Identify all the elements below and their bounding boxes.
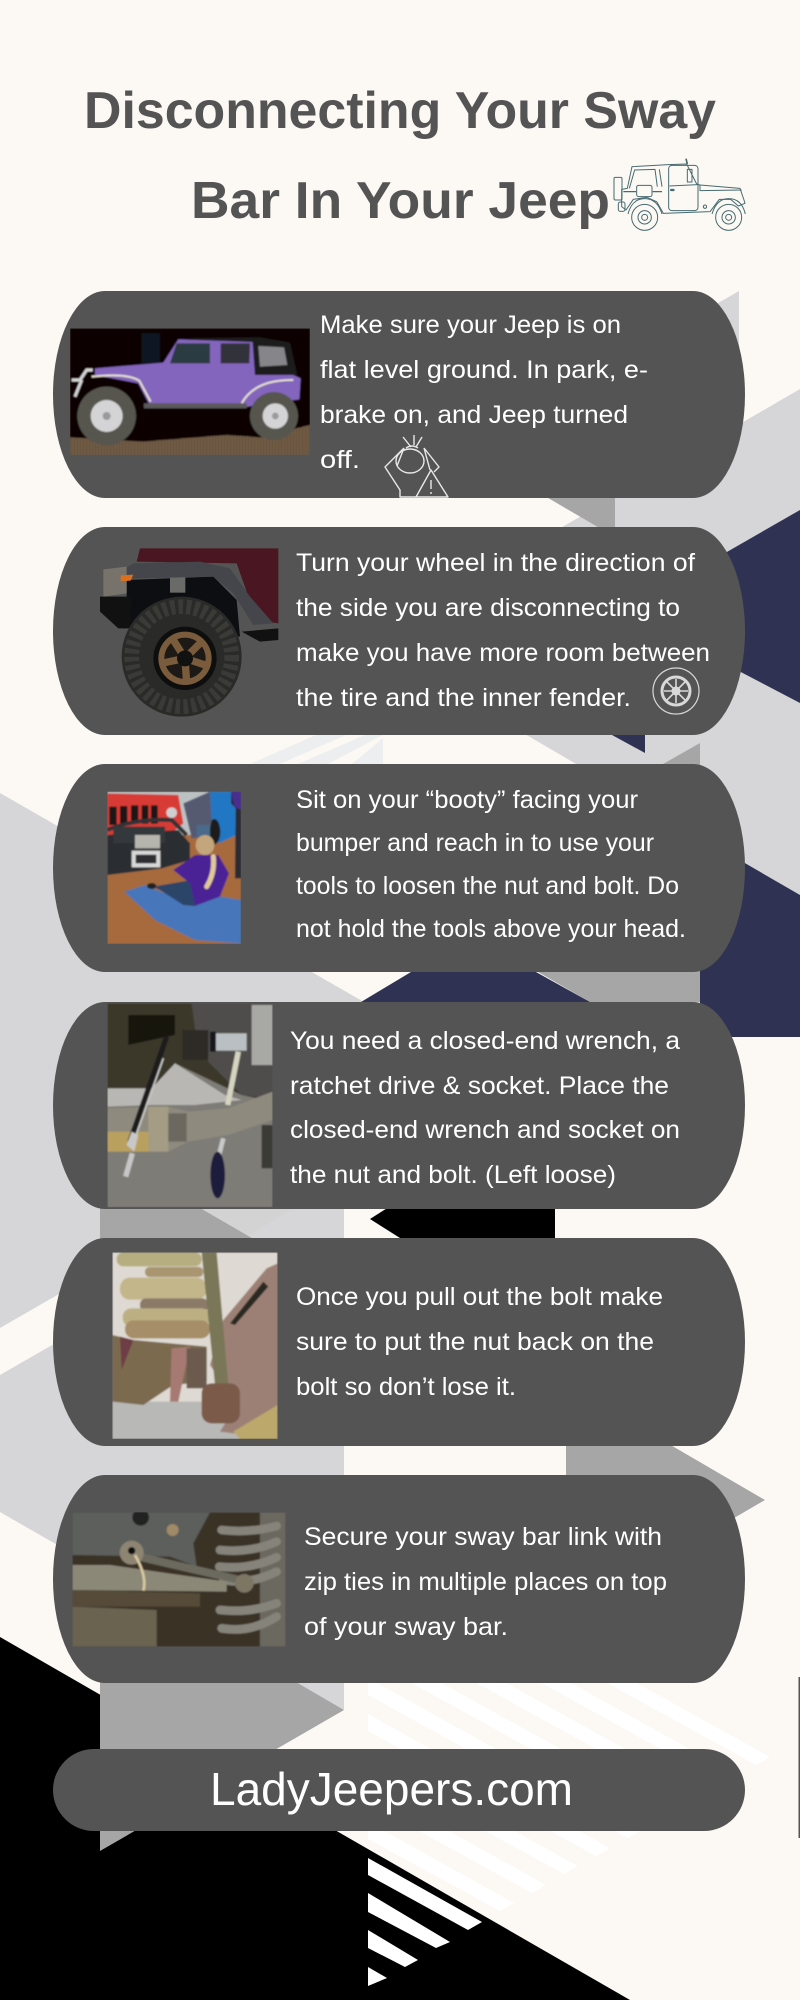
text: step 6: of your sway bar. xyxy=(304,1613,508,1641)
icon: jeep outline xyxy=(614,159,745,230)
footer: website banner xyxy=(53,1749,745,1831)
panel: step 1 level ground xyxy=(53,291,745,498)
photo: coil spring and link xyxy=(112,1252,278,1439)
text: step 6: zip ties in multiple places on top xyxy=(304,1568,667,1596)
photo: purple jeep xyxy=(70,328,310,455)
photo: sway bar zip tied xyxy=(72,1509,286,1647)
text: step 4: You need a closed-end wrench, a xyxy=(290,1027,680,1055)
text: step 3 xyxy=(296,786,686,943)
panel: step 6 zip ties xyxy=(53,1475,745,1683)
text: step 2: the tire and the inner fender. xyxy=(296,684,631,712)
text: step 4: closed-end wrench and socket on xyxy=(290,1116,680,1144)
text: step 4: ratchet drive & socket. Place the xyxy=(290,1072,669,1100)
text: step 2 xyxy=(296,549,710,712)
text: step 2: Turn your wheel in the direction of xyxy=(296,549,695,577)
photo: wrench and ratchet on sway bar link xyxy=(107,1003,273,1207)
text: step 3: not hold the tools above your head. xyxy=(296,915,686,943)
panel: step 4 tools on nut and bolt xyxy=(53,1002,745,1209)
text: step 3: tools to loosen the nut and bolt. Do xyxy=(296,872,679,900)
text: step 5: sure to put the nut back on the xyxy=(296,1328,654,1356)
panel: step 2 turn wheel xyxy=(53,527,745,735)
text: step 6 xyxy=(304,1523,667,1641)
icon: stressed person with warning xyxy=(385,435,448,497)
text: step 1 xyxy=(320,311,648,474)
text: step 4 xyxy=(290,1027,680,1189)
text: step 5: Once you pull out the bolt make xyxy=(296,1283,663,1311)
text: step 6: Secure your sway bar link with xyxy=(304,1523,662,1551)
text: step 5 xyxy=(296,1283,663,1401)
panel: step 3 sit on booty xyxy=(53,764,745,972)
title: Disconnecting Your Sway xyxy=(84,82,716,140)
text: step 5: bolt so don’t lose it. xyxy=(296,1373,516,1401)
text: step 1: off. xyxy=(320,446,360,474)
text: step 2: the side you are disconnecting to xyxy=(296,594,680,622)
text: step 4: the nut and bolt. (Left loose) xyxy=(290,1161,616,1189)
text: step 1: Make sure your Jeep is on xyxy=(320,311,621,339)
text: step 3: bumper and reach in to use your xyxy=(296,829,654,857)
footer: website banner: LadyJeepers.com xyxy=(210,1763,573,1815)
text: step 1: flat level ground. In park, e- xyxy=(320,356,648,384)
text: step 1: brake on, and Jeep turned xyxy=(320,401,628,429)
text: step 2: make you have more room between xyxy=(296,639,710,667)
panel: step 5 pull out the bolt xyxy=(53,1238,745,1446)
text: step 3: Sit on your “booty” facing your xyxy=(296,786,638,814)
icon: wheel xyxy=(653,668,699,714)
photo: jeep tire and fender xyxy=(100,548,278,717)
title: Bar In Your Jeep xyxy=(191,172,610,230)
photo: woman sitting by bumper xyxy=(107,792,241,944)
title xyxy=(84,82,716,230)
